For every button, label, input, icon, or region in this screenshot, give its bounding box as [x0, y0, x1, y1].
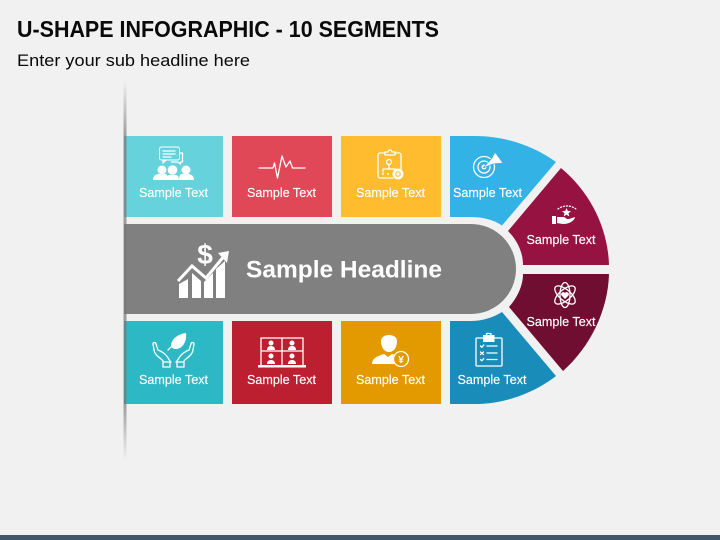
- icon: businessman with yen coin: ¥: [398, 355, 404, 366]
- label: Sample Text: [453, 186, 523, 200]
- footer bar: [0, 535, 720, 540]
- vertical divider line: [124, 80, 126, 460]
- icon: hands holding leaf: [153, 333, 194, 367]
- icon: clipboard with flow: [378, 150, 404, 180]
- label: Sample Text: [458, 373, 527, 387]
- segment: dark red bottom: [232, 321, 332, 404]
- segment: teal top: [124, 136, 223, 217]
- title: U-SHAPE INFOGRAPHIC - 10 SEGMENTS: [17, 16, 439, 42]
- icon: pulse line: [259, 156, 305, 178]
- label: Sample Text: [526, 315, 596, 329]
- label: Sample Text: [526, 233, 596, 247]
- segment: maroon lower: [509, 274, 609, 371]
- icon: target and arrow: [474, 152, 503, 178]
- icon: rising chart with dollar: $: [197, 239, 213, 270]
- headline: Sample Headline: [246, 256, 442, 284]
- icon: hand with star: [552, 206, 576, 224]
- segment: teal bottom: [124, 321, 223, 404]
- segment: yellow top: [341, 136, 441, 217]
- label: Sample Text: [247, 373, 317, 387]
- subtitle: Enter your sub headline here: [17, 51, 250, 70]
- segment: red top: [232, 136, 332, 217]
- segment: blue top: [450, 136, 556, 226]
- segment: amber bottom: [341, 321, 441, 404]
- label: Sample Text: [247, 186, 317, 200]
- panel: central headline bar: [124, 224, 516, 314]
- icon: checklist clipboard: [476, 334, 502, 366]
- segment: blue bottom: [450, 312, 556, 404]
- icon: video meeting laptop: [258, 338, 306, 368]
- icon: people chat: [153, 147, 194, 180]
- icon: atom: [552, 282, 578, 308]
- label: Sample Text: [356, 373, 426, 387]
- label: Sample Text: [139, 373, 209, 387]
- segment: crimson upper: [508, 168, 609, 265]
- label: Sample Text: [356, 186, 426, 200]
- label: Sample Text: [139, 186, 209, 200]
- icon: rising chart with dollar: [178, 239, 229, 298]
